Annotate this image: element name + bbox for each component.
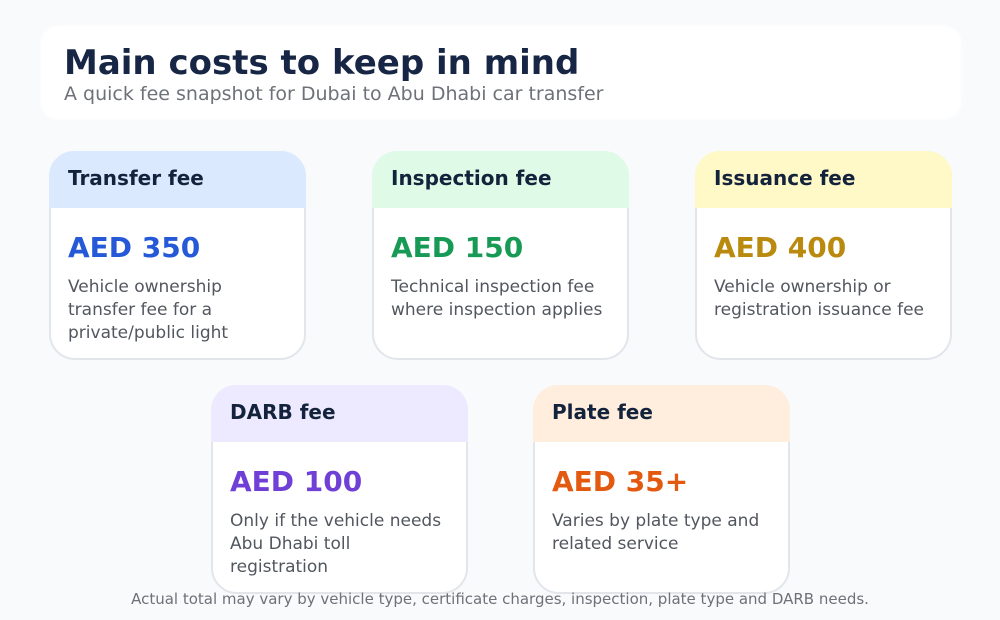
header panel: [40, 26, 962, 120]
amount: AED 35+: [552, 465, 688, 498]
amount: AED 400: [714, 231, 846, 264]
amount: AED 350: [68, 231, 200, 264]
panel: DARB fee: [211, 385, 468, 593]
heading: Inspection fee: [391, 166, 552, 190]
panel: transfer fee: [49, 151, 306, 359]
heading: DARB fee: [230, 400, 336, 424]
description: Only if the vehicle needs: [230, 511, 441, 531]
panel: plate fee: [533, 385, 790, 593]
description: registration issuance fee: [714, 300, 924, 320]
card header: [49, 151, 306, 208]
description: Varies by plate type and: [552, 511, 759, 531]
panel: issuance fee: [695, 151, 952, 359]
title: Main costs to keep in mind: [64, 43, 579, 83]
description: transfer fee for a: [68, 300, 212, 320]
footnote: Actual total may vary by vehicle type, certificate charges, inspection, plate type and DARB needs.: [131, 590, 869, 608]
card header: [695, 151, 952, 208]
card header: [372, 151, 629, 208]
amount: AED 150: [391, 231, 523, 264]
card header: [533, 385, 790, 442]
subtitle: A quick fee snapshot for Dubai to Abu Dhabi car transfer: [64, 83, 604, 105]
description: Vehicle ownership or: [714, 277, 891, 297]
description: private/public light: [68, 323, 228, 343]
amount: AED 100: [230, 465, 362, 498]
card header: [211, 385, 468, 442]
heading: Plate fee: [552, 400, 653, 424]
description: registration: [230, 557, 328, 577]
description: Abu Dhabi toll: [230, 534, 350, 554]
heading: Issuance fee: [714, 166, 855, 190]
panel: inspection fee: [372, 151, 629, 359]
description: where inspection applies: [391, 300, 602, 320]
description: Technical inspection fee: [390, 277, 594, 297]
description: related service: [552, 534, 678, 554]
heading: Transfer fee: [68, 166, 204, 190]
description: Vehicle ownership: [68, 277, 222, 297]
